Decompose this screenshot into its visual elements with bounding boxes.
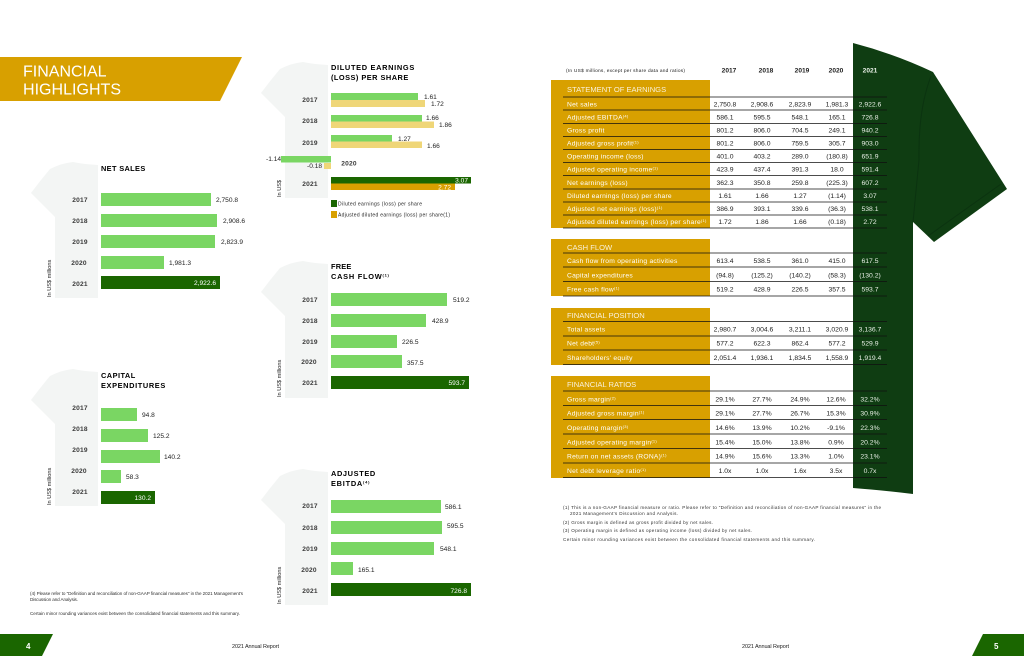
table rows: earnings bbox=[563, 97, 887, 228]
bar chart: diluted earnings: 3.07 bbox=[455, 178, 468, 184]
title banner: FINANCIAL bbox=[23, 64, 107, 80]
table rows: financial ratios: Adjusted gross margin bbox=[567, 410, 639, 418]
bar chart: diluted earnings: 1.27 bbox=[398, 136, 411, 143]
title banner bbox=[0, 57, 242, 101]
axis label: In US$ millions bbox=[277, 566, 283, 604]
table rows: earnings: 801.2 bbox=[716, 140, 734, 148]
heading: free cash flow: FREE bbox=[331, 262, 352, 271]
footer: page 5: 2021 Annual Report bbox=[742, 644, 789, 650]
table rows: cash flow: (94.8) bbox=[716, 272, 734, 280]
bar chart: free cash flow: 2018 bbox=[302, 318, 318, 325]
table rows: financial ratios: 13.3% bbox=[790, 454, 810, 460]
table rows: earnings: (225.3) bbox=[826, 180, 848, 187]
table rows: earnings: 3.07 bbox=[863, 193, 877, 200]
footnotes: right page: (1) This is a non-GAAP financial measure or ratio. Please refer to "Definition and reconciliation of non-GAAP financial measures" in the bbox=[563, 505, 881, 510]
table rows: financial ratios: Gross margin bbox=[567, 396, 610, 404]
table rows: earnings: 651.9 bbox=[861, 154, 879, 160]
table rows: financial ratios: 13.9% bbox=[752, 425, 772, 432]
bar chart: net sales: 2,823.9 bbox=[221, 239, 243, 246]
table rows: earnings: (0.18) bbox=[828, 219, 846, 226]
table rows: earnings: 18.0 bbox=[830, 166, 844, 174]
table header bbox=[566, 68, 878, 74]
table rows: earnings: (1) bbox=[633, 140, 639, 144]
table rows: earnings: 289.0 bbox=[791, 154, 809, 160]
table rows: earnings: 806.0 bbox=[753, 140, 771, 148]
bar chart: diluted earnings: 1.66 bbox=[426, 115, 439, 122]
table rows: financial ratios: 15.3% bbox=[826, 410, 846, 418]
bar chart: free cash flow: 226.5 bbox=[402, 339, 419, 346]
axis label: In US$ millions bbox=[47, 467, 53, 505]
table rows: financial ratios: 3.5x bbox=[830, 468, 843, 475]
table rows: earnings: Operating income (loss) bbox=[567, 154, 644, 160]
icon: t-shirt bbox=[261, 261, 328, 398]
table rows: financial position: 3,136.7 bbox=[859, 326, 882, 334]
legend bbox=[331, 200, 450, 218]
bar chart: capital expenditures: 58.3 bbox=[126, 474, 139, 481]
table rows: cash flow: Cash flow from operating activities bbox=[567, 258, 678, 265]
table rows: financial ratios: 14.6% bbox=[715, 425, 735, 432]
table rows: cash flow: 415.0 bbox=[828, 258, 846, 265]
table rows: financial ratios: (1) bbox=[640, 467, 646, 472]
table rows: financial ratios: 0.7x bbox=[864, 468, 877, 475]
bar chart: adjusted ebitda: 2020 bbox=[301, 567, 317, 574]
table rows: financial position: 2,980.7 bbox=[714, 326, 737, 334]
table rows: earnings: 401.0 bbox=[716, 154, 734, 160]
table header: (In US$ millions, except per share data and ratios) bbox=[566, 68, 685, 74]
bar chart: net sales bbox=[71, 193, 245, 289]
panel: capital expenditures bbox=[31, 369, 181, 506]
table rows: earnings: Gross profit bbox=[567, 128, 605, 134]
heading: adjusted ebitda bbox=[331, 469, 376, 488]
table rows: financial ratios: 23.1% bbox=[860, 454, 880, 460]
bar chart: net sales: 2,922.6 bbox=[194, 280, 216, 287]
bar chart: diluted earnings: 2020 bbox=[341, 160, 357, 168]
table rows: earnings: Adjusted diluted earnings (loss) per share bbox=[567, 219, 701, 226]
legend: Adjusted diluted earnings (loss) per share(1) bbox=[338, 212, 450, 218]
table header: 2021 bbox=[863, 68, 878, 74]
bar chart: adjusted ebitda bbox=[301, 500, 471, 596]
bar chart: free cash flow: 519.2 bbox=[453, 297, 470, 304]
table rows: earnings: Adjusted gross profit bbox=[567, 140, 633, 148]
heading: diluted earnings bbox=[331, 63, 415, 82]
bar chart: diluted earnings bbox=[266, 93, 471, 192]
panel: diluted earnings per share bbox=[261, 62, 471, 218]
table rows: financial ratios: 29.1% bbox=[715, 396, 735, 404]
table header: 2019 bbox=[795, 68, 810, 74]
table rows: earnings: 1.66 bbox=[755, 193, 769, 200]
table rows: financial ratios: 13.8% bbox=[790, 440, 810, 446]
bar chart: net sales: 2019 bbox=[72, 239, 88, 246]
icon: t-shirt bbox=[261, 469, 328, 605]
icon: t-shirt bbox=[31, 162, 98, 298]
table rows: earnings: Net sales bbox=[567, 102, 598, 108]
table rows: earnings: 437.4 bbox=[753, 166, 771, 174]
bar chart: adjusted ebitda: 726.8 bbox=[450, 588, 467, 595]
bar chart: capital expenditures: 2018 bbox=[72, 426, 88, 433]
table rows: cash flow: 357.5 bbox=[828, 286, 846, 294]
bar chart: net sales: 2,750.8 bbox=[216, 197, 238, 204]
table rows: earnings: (1) bbox=[657, 205, 663, 210]
table rows: earnings: 1.86 bbox=[755, 219, 769, 226]
table rows: earnings: 607.2 bbox=[861, 180, 879, 187]
panel: cash flow bbox=[551, 239, 887, 296]
heading: adjusted ebitda: (4) bbox=[363, 480, 370, 484]
table rows: earnings: 2,750.8 bbox=[714, 102, 737, 108]
table rows: earnings: 2,922.6 bbox=[859, 102, 882, 108]
table rows: financial ratios: (2) bbox=[610, 396, 616, 400]
bar chart: diluted earnings: -1.14 bbox=[266, 156, 281, 163]
footer: page 4 bbox=[0, 634, 279, 656]
table rows: financial ratios: (1) bbox=[639, 410, 645, 414]
bar chart: adjusted ebitda: 2017 bbox=[302, 503, 318, 510]
panel: financial position bbox=[551, 308, 887, 365]
table rows: financial ratios: 29.1% bbox=[715, 410, 735, 418]
heading: adjusted ebitda: EBITDA bbox=[331, 479, 363, 488]
footnote: left page: Discussion and Analysis. bbox=[30, 597, 78, 602]
table rows: earnings: 548.1 bbox=[791, 114, 809, 122]
table rows: cash flow: 593.7 bbox=[861, 286, 879, 294]
axis label: In US$ bbox=[277, 179, 283, 197]
table rows: financial ratios: 27.7% bbox=[752, 410, 772, 418]
table rows: cash flow: 428.9 bbox=[753, 286, 771, 294]
panel: net sales bbox=[31, 162, 245, 298]
table rows: financial position: 622.3 bbox=[753, 340, 771, 348]
table rows: cash flow: (130.2) bbox=[859, 272, 881, 280]
footer: page 5 bbox=[742, 634, 1024, 656]
table rows: financial ratios: 10.2% bbox=[790, 425, 810, 432]
table rows: financial ratios: 1.6x bbox=[794, 468, 807, 475]
bar chart: capital expenditures bbox=[71, 405, 181, 504]
table rows: financial position: 1,558.9 bbox=[826, 355, 849, 362]
bar chart: diluted earnings: 1.61 bbox=[424, 94, 437, 101]
table rows: earnings: Diluted earnings (loss) per share bbox=[567, 193, 672, 200]
heading: diluted earnings: DILUTED EARNINGS bbox=[331, 63, 415, 72]
bar chart: free cash flow: 357.5 bbox=[407, 360, 424, 367]
table rows: cash flow: 226.5 bbox=[791, 286, 809, 294]
table rows: financial position: 1,919.4 bbox=[859, 355, 882, 362]
table rows: earnings: Adjusted operating income bbox=[567, 166, 652, 174]
bar chart: capital expenditures: 2017 bbox=[72, 405, 88, 412]
table rows: financial position: 577.2 bbox=[716, 340, 734, 348]
table rows: financial ratios: 15.0% bbox=[752, 440, 772, 446]
bar chart: adjusted ebitda: 2021 bbox=[302, 588, 318, 595]
bar chart: capital expenditures: 130.2 bbox=[134, 495, 151, 502]
bar chart: diluted earnings: 2021 bbox=[302, 181, 318, 188]
table header: 2017 bbox=[722, 68, 737, 74]
table rows: earnings: 591.4 bbox=[861, 166, 879, 174]
table rows: earnings: 386.9 bbox=[716, 206, 734, 213]
table rows: earnings: 165.1 bbox=[828, 114, 846, 122]
table rows: earnings: 259.8 bbox=[791, 180, 809, 187]
panel: adjusted ebitda bbox=[261, 469, 471, 605]
bar chart: diluted earnings: -0.18 bbox=[307, 163, 322, 170]
heading: statement of earnings: STATEMENT OF EARNINGS bbox=[567, 85, 666, 94]
table rows: financial position: 3,211.1 bbox=[789, 326, 811, 334]
panel: free cash flow bbox=[261, 261, 470, 398]
panel: financial ratios bbox=[551, 376, 887, 478]
heading: adjusted ebitda: ADJUSTED bbox=[331, 469, 376, 478]
table rows: earnings: 586.1 bbox=[716, 114, 734, 122]
heading: free cash flow: (1) bbox=[382, 272, 390, 278]
footnote: left page bbox=[30, 591, 244, 616]
table rows: earnings: Net earnings (loss) bbox=[567, 180, 628, 187]
bar chart: diluted earnings: 1.72 bbox=[431, 101, 444, 108]
bar chart: free cash flow: 2017 bbox=[302, 297, 318, 304]
bar chart: diluted earnings: 1.66 bbox=[427, 143, 440, 150]
axis label: In US$ millions bbox=[47, 259, 53, 297]
table rows: earnings: (1) bbox=[701, 218, 707, 223]
table rows: earnings: 2.72 bbox=[863, 219, 877, 226]
table rows: cash flow: 617.5 bbox=[861, 258, 879, 265]
bar chart: diluted earnings: 2019 bbox=[302, 140, 318, 147]
table rows: financial ratios: 15.6% bbox=[752, 454, 772, 460]
bar chart: free cash flow: 428.9 bbox=[432, 318, 449, 325]
heading: capital expenditures bbox=[101, 371, 166, 390]
bar chart: adjusted ebitda: 2018 bbox=[302, 525, 318, 532]
footer: page 5: 5 bbox=[994, 642, 999, 651]
table rows: financial position: 3,020.9 bbox=[826, 326, 849, 334]
table rows: earnings: 1.61 bbox=[718, 193, 732, 200]
table rows: financial ratios: 15.4% bbox=[715, 440, 735, 446]
footnotes: right page bbox=[563, 505, 881, 542]
icon: t-shirt bbox=[31, 369, 98, 506]
table rows: earnings: 2,908.6 bbox=[751, 102, 774, 108]
table rows: earnings: 806.0 bbox=[753, 128, 771, 134]
table rows: earnings: 403.2 bbox=[753, 154, 771, 160]
bar chart: adjusted ebitda: 595.5 bbox=[447, 523, 464, 530]
table rows: financial ratios: 32.2% bbox=[860, 396, 880, 404]
heading: diluted earnings: (LOSS) PER SHARE bbox=[331, 73, 409, 82]
heading: financial position: FINANCIAL POSITION bbox=[567, 311, 645, 320]
table rows: financial position: 1,834.5 bbox=[789, 355, 812, 362]
table rows: financial ratios: 1.0x bbox=[756, 468, 769, 475]
bar chart: net sales: 1,981.3 bbox=[169, 260, 191, 267]
table rows: earnings: Adjusted net earnings (loss) bbox=[567, 206, 657, 213]
bar chart: adjusted ebitda: 586.1 bbox=[445, 504, 462, 511]
table rows: financial position: 2,051.4 bbox=[714, 355, 737, 362]
table rows: earnings: 362.3 bbox=[716, 180, 734, 187]
table rows: earnings: 350.8 bbox=[753, 180, 771, 187]
bar chart: net sales: 2,908.6 bbox=[223, 218, 245, 225]
bar chart: capital expenditures: 2021 bbox=[72, 489, 88, 496]
bar chart: diluted earnings: 2018 bbox=[302, 118, 318, 125]
table rows: cash flow: Free cash flow bbox=[567, 286, 614, 294]
bar chart: net sales: 2017 bbox=[72, 197, 88, 204]
legend: Diluted earnings (loss) per share bbox=[338, 202, 422, 208]
table rows: earnings: (4) bbox=[623, 114, 629, 118]
dark green t-shirt bbox=[853, 43, 1007, 494]
table rows: earnings: 940.2 bbox=[861, 128, 879, 134]
table rows: earnings: 1,981.3 bbox=[826, 102, 849, 108]
table rows: earnings: 305.7 bbox=[828, 140, 846, 148]
footnotes: right page: (3) Operating margin is defined as operating income (loss) divided by net sales. bbox=[563, 528, 752, 533]
table rows: earnings: 393.1 bbox=[753, 206, 771, 213]
table rows: financial ratios: 20.2% bbox=[860, 440, 880, 446]
table rows: earnings: 249.1 bbox=[828, 128, 846, 134]
table rows: financial position: 577.2 bbox=[828, 340, 846, 348]
bar chart: capital expenditures: 94.8 bbox=[142, 412, 155, 419]
heading: financial ratios: FINANCIAL RATIOS bbox=[567, 380, 636, 389]
table rows: earnings: Adjusted EBITDA bbox=[567, 114, 623, 122]
table rows: cash flow: (1) bbox=[614, 286, 620, 290]
table rows: financial ratios: Return on net assets (RONA) bbox=[567, 454, 661, 460]
bar chart: free cash flow bbox=[301, 293, 470, 389]
table rows: earnings: 538.1 bbox=[861, 206, 879, 213]
table rows: earnings: 423.9 bbox=[716, 166, 734, 174]
axis label: In US$ millions bbox=[277, 359, 283, 397]
bar chart: capital expenditures: 2019 bbox=[72, 447, 88, 454]
footnote: left page: Certain minor rounding variances exist between the consolidated financial statements and this summary. bbox=[30, 611, 240, 616]
table rows: earnings: 2,823.9 bbox=[789, 102, 812, 108]
table rows: financial ratios bbox=[563, 391, 887, 478]
bar chart: free cash flow: 593.7 bbox=[448, 380, 465, 387]
table rows: cash flow: Capital expenditures bbox=[567, 272, 633, 280]
heading: net sales: NET SALES bbox=[101, 164, 146, 173]
table rows: earnings: (1.14) bbox=[828, 193, 846, 200]
bar chart: free cash flow: 2020 bbox=[301, 359, 317, 366]
table rows: financial ratios: 26.7% bbox=[790, 410, 810, 418]
bar chart: capital expenditures: 140.2 bbox=[164, 454, 181, 461]
table rows: earnings: 1.27 bbox=[793, 193, 807, 200]
table rows: cash flow: (125.2) bbox=[751, 272, 773, 280]
bar chart: adjusted ebitda: 165.1 bbox=[358, 567, 375, 574]
table rows: cash flow: (58.3) bbox=[828, 272, 846, 280]
heading: capital expenditures: EXPENDITURES bbox=[101, 381, 166, 390]
title banner: HIGHLIGHTS bbox=[23, 82, 121, 98]
bar chart: net sales: 2018 bbox=[72, 218, 88, 225]
table rows: cash flow: 361.0 bbox=[791, 258, 809, 265]
panel: statement of earnings bbox=[551, 80, 887, 228]
table rows: financial ratios: (1) bbox=[661, 452, 667, 458]
table rows: financial position: Net debt bbox=[567, 340, 594, 348]
table rows: financial ratios: 22.3% bbox=[860, 425, 880, 432]
table rows: financial ratios: 1.0% bbox=[828, 454, 844, 460]
table rows: earnings: 801.2 bbox=[716, 128, 734, 134]
table rows: financial ratios: (3) bbox=[623, 424, 629, 429]
footnote: left page: (4) Please refer to "Definition and reconciliation of non-GAAP financial measures" in the 2021 Management's bbox=[30, 591, 244, 596]
footnotes: right page: Certain minor rounding variances exist between the consolidated financial statements and this summary. bbox=[563, 537, 815, 542]
bar chart: net sales: 2020 bbox=[71, 260, 87, 267]
table rows: financial position: (5) bbox=[594, 340, 600, 344]
table rows: earnings: 1.66 bbox=[793, 219, 807, 226]
table rows: financial position: Total assets bbox=[567, 326, 606, 334]
bar chart: free cash flow: 2019 bbox=[302, 339, 318, 346]
table rows: financial position: 862.4 bbox=[791, 340, 809, 348]
table rows: cash flow: 538.5 bbox=[753, 258, 771, 265]
table rows: earnings: 391.3 bbox=[791, 166, 809, 174]
table rows: earnings: (36.3) bbox=[828, 206, 846, 213]
bar chart: diluted earnings: 1.86 bbox=[439, 122, 452, 129]
table rows: financial position bbox=[563, 322, 887, 364]
bar chart: free cash flow: 2021 bbox=[302, 380, 318, 387]
table rows: earnings: (180.8) bbox=[826, 154, 848, 160]
bar chart: adjusted ebitda: 548.1 bbox=[440, 546, 457, 553]
footer: page 4: 2021 Annual Report bbox=[232, 644, 279, 650]
table rows: financial ratios: 27.7% bbox=[752, 396, 772, 404]
table rows: financial ratios: 12.6% bbox=[826, 396, 846, 404]
footnotes: right page: 2021 Management's Discussion and Analysis. bbox=[570, 511, 678, 516]
table rows: earnings: 704.5 bbox=[791, 128, 809, 134]
table rows: cash flow: (140.2) bbox=[789, 272, 811, 280]
bar chart: diluted earnings: 2.72 bbox=[438, 184, 451, 192]
table rows: cash flow bbox=[563, 253, 887, 296]
footer: page 4: 4 bbox=[26, 642, 31, 651]
table rows: earnings: 726.8 bbox=[861, 114, 879, 122]
table rows: financial ratios: 1.0x bbox=[719, 468, 732, 475]
table rows: financial ratios: 30.9% bbox=[860, 410, 880, 418]
table rows: financial position: 3,004.6 bbox=[751, 326, 774, 334]
heading: cash flow: CASH FLOW bbox=[567, 243, 613, 252]
table rows: financial position: Shareholders' equity bbox=[567, 355, 633, 362]
table header: 2018 bbox=[759, 68, 774, 74]
table rows: financial ratios: Adjusted operating margin bbox=[567, 440, 651, 446]
table rows: cash flow: 519.2 bbox=[716, 286, 734, 294]
table rows: financial ratios: (1) bbox=[651, 438, 657, 444]
table header: 2020 bbox=[829, 68, 844, 74]
table rows: financial ratios: -9.1% bbox=[827, 425, 845, 432]
table rows: earnings: (1) bbox=[652, 166, 658, 170]
table rows: earnings: 595.5 bbox=[753, 114, 771, 122]
bar chart: adjusted ebitda: 2019 bbox=[302, 546, 318, 553]
table rows: financial position: 529.9 bbox=[861, 340, 879, 348]
table rows: financial ratios: 24.9% bbox=[790, 396, 810, 404]
table rows: financial ratios: 14.9% bbox=[715, 454, 735, 460]
bar chart: capital expenditures: 2020 bbox=[71, 468, 87, 475]
table rows: earnings: 339.6 bbox=[791, 206, 809, 213]
table rows: financial position: 1,936.1 bbox=[751, 355, 774, 362]
table rows: earnings: 1.72 bbox=[718, 219, 732, 226]
bar chart: capital expenditures: 125.2 bbox=[153, 433, 170, 440]
footnotes: right page: (2) Gross margin is defined as gross profit divided by net sales. bbox=[563, 520, 713, 525]
table rows: financial ratios: 0.9% bbox=[828, 440, 844, 446]
icon: t-shirt bbox=[261, 62, 328, 198]
table rows: cash flow: 613.4 bbox=[716, 258, 734, 265]
bar chart: net sales: 2021 bbox=[72, 281, 88, 288]
table rows: earnings: 903.0 bbox=[861, 140, 879, 148]
heading: capital expenditures: CAPITAL bbox=[101, 371, 136, 380]
table rows: earnings: 759.5 bbox=[791, 140, 809, 148]
table rows: financial ratios: Net debt leverage ratio bbox=[567, 468, 640, 475]
heading: free cash flow: CASH FLOW bbox=[331, 272, 382, 281]
bar chart: diluted earnings: 2017 bbox=[302, 97, 318, 104]
table rows: financial ratios: Operating margin bbox=[567, 425, 623, 432]
heading: free cash flow bbox=[331, 262, 390, 281]
